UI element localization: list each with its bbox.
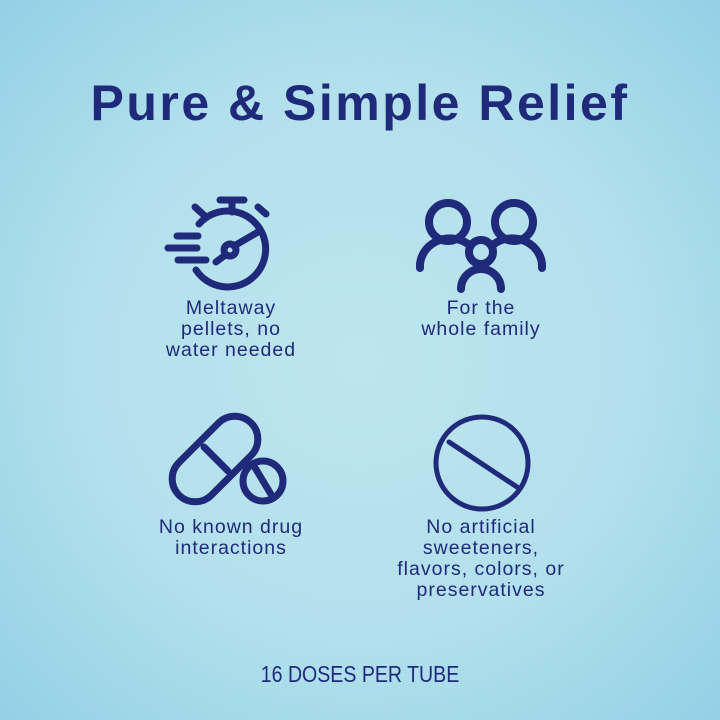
icon: prohibited xyxy=(436,417,528,509)
caption: drug interactions xyxy=(159,516,303,559)
title: Pure & Simple Relief xyxy=(90,75,630,131)
caption: drug interactions: interactions xyxy=(175,537,287,559)
footer: 16 DOSES PER TUBE xyxy=(261,661,459,687)
caption: family: For the xyxy=(447,297,515,319)
caption: no artificial xyxy=(397,516,565,601)
caption: meltaway: water needed xyxy=(166,339,296,361)
icon: pills xyxy=(163,407,283,511)
caption: drug interactions: No known drug xyxy=(159,516,303,538)
caption: family xyxy=(421,297,541,340)
caption: no artificial: preservatives xyxy=(417,579,545,601)
caption: family: whole family xyxy=(421,318,541,340)
icon: family xyxy=(420,203,542,289)
caption: no artificial: flavors, colors, or xyxy=(397,558,565,580)
caption: meltaway: Meltaway xyxy=(186,297,276,319)
caption: no artificial: sweeteners, xyxy=(423,537,539,559)
icon: stopwatch xyxy=(168,200,266,287)
caption: meltaway xyxy=(166,297,296,361)
caption: meltaway: pellets, no xyxy=(181,318,281,340)
caption: no artificial: No artificial xyxy=(426,516,536,538)
